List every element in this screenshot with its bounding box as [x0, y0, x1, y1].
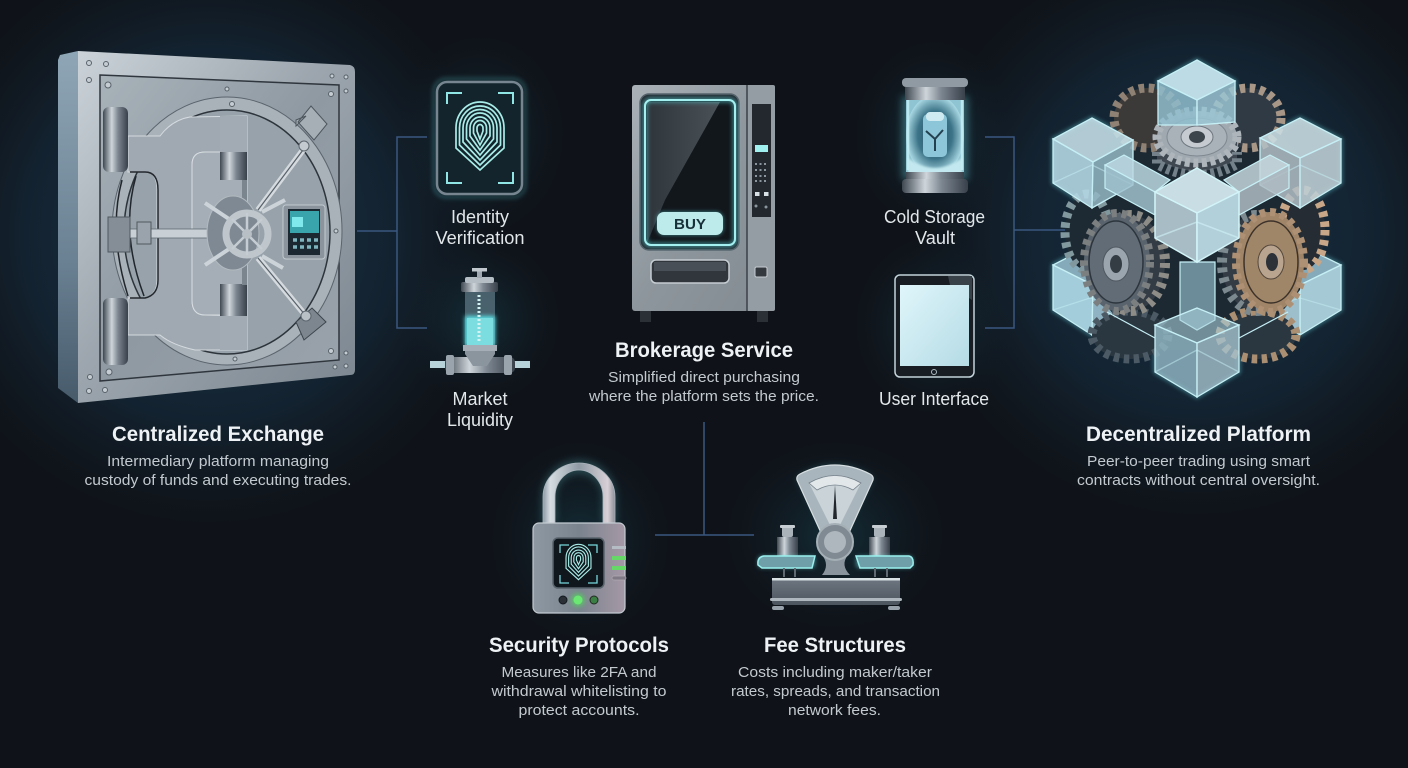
label: market liquidity: Market: [452, 389, 508, 409]
panel: security protocols: [489, 463, 669, 719]
heading: decentralized platform: Decentralized Platform: [1086, 423, 1311, 446]
connector: decentralized platform branch: [985, 137, 1065, 328]
text: fee structures description: rates, spreads, and transaction: [731, 683, 940, 700]
panel: decentralized platform: [1053, 60, 1341, 489]
rivets: [86, 60, 348, 394]
label: identity verification: Verification: [436, 228, 524, 248]
label: market liquidity: Liquidity: [447, 410, 513, 430]
text: decentralized platform description: contracts without central oversight.: [1077, 472, 1320, 489]
cube: right: [1260, 118, 1341, 208]
cube: lower left: [1053, 245, 1133, 335]
cube: left: [1053, 118, 1133, 208]
panel: market liquidity: [430, 268, 530, 430]
label: user interface: User Interface: [879, 389, 989, 409]
icon: weighing scale: [758, 465, 913, 610]
panel: fee structures: [731, 465, 940, 719]
text: fee structures description: network fees.: [788, 702, 881, 719]
text: security protocols description: withdrawal whitelisting to: [490, 683, 666, 700]
connector: centralized exchange branch: [357, 137, 427, 328]
wheel: [207, 196, 259, 270]
heading: security protocols: Security Protocols: [489, 634, 669, 657]
label: cold storage vault: [884, 207, 985, 248]
panel: brokerage service: [588, 85, 819, 405]
glass bars: [1105, 155, 1289, 338]
icon: vending machine with buy button: [632, 85, 775, 322]
text: fee structures description: [731, 664, 940, 719]
cube: lower right: [1260, 245, 1341, 335]
button label: BUY: [674, 216, 706, 233]
panel: centralized exchange: [58, 51, 355, 489]
icon: bank vault door: [58, 51, 355, 403]
icon: cold storage jar: [902, 78, 968, 193]
cube: centre: [1155, 168, 1239, 262]
text: decentralized platform description: [1077, 453, 1320, 489]
handle bar: [128, 229, 223, 238]
text: security protocols description: Measures like 2FA and: [502, 664, 656, 681]
top gear: [1157, 137, 1237, 171]
icon: liquidity valve with glass cylinder: [430, 268, 530, 375]
hinges: [103, 107, 128, 172]
text: security protocols description: protect accounts.: [518, 702, 640, 719]
icon: glass cubes and gears: [1053, 60, 1341, 397]
label: cold storage vault: Cold Storage: [884, 207, 985, 227]
keypad: [283, 205, 325, 259]
icon: padlock with fingerprint: [533, 463, 626, 613]
back gears: [1090, 120, 1310, 350]
text: centralized exchange description: custody of funds and executing trades.: [84, 472, 352, 489]
heading: centralized exchange: Centralized Exchange: [112, 423, 324, 446]
icon: fingerprint scanner card: [434, 79, 525, 197]
text: brokerage service description: Simplified direct purchasing: [608, 369, 800, 386]
panel: cold storage vault: [884, 78, 985, 248]
panel: user interface: [879, 275, 989, 409]
locking arms: [258, 146, 306, 316]
right gear: [1222, 215, 1290, 311]
cube: bottom: [1155, 308, 1239, 397]
panel: identity verification: [434, 79, 525, 248]
text: brokerage service description: [588, 369, 819, 405]
text: security protocols description: [490, 664, 666, 719]
label: cold storage vault: Vault: [915, 228, 955, 248]
heading: brokerage service: Brokerage Service: [615, 339, 793, 362]
door plate: [128, 116, 247, 350]
cube glow: [1053, 60, 1341, 397]
text: brokerage service description: where the platform sets the price.: [588, 388, 819, 405]
text: decentralized platform description: Peer-to-peer trading using smart: [1087, 453, 1311, 470]
text: fee structures description: Costs including maker/taker: [738, 664, 932, 681]
left gear: [1097, 215, 1165, 311]
connector: brokerage to security and fees: [655, 422, 754, 535]
heading: fee structures: Fee Structures: [764, 634, 906, 657]
text: centralized exchange description: Intermediary platform managing: [107, 453, 329, 470]
icon: tablet: [895, 275, 974, 377]
label: identity verification: [436, 207, 524, 248]
text: centralized exchange description: [84, 453, 352, 489]
label: identity verification: Identity: [451, 207, 509, 227]
label: market liquidity: [447, 389, 513, 430]
cube: top: [1158, 60, 1235, 125]
